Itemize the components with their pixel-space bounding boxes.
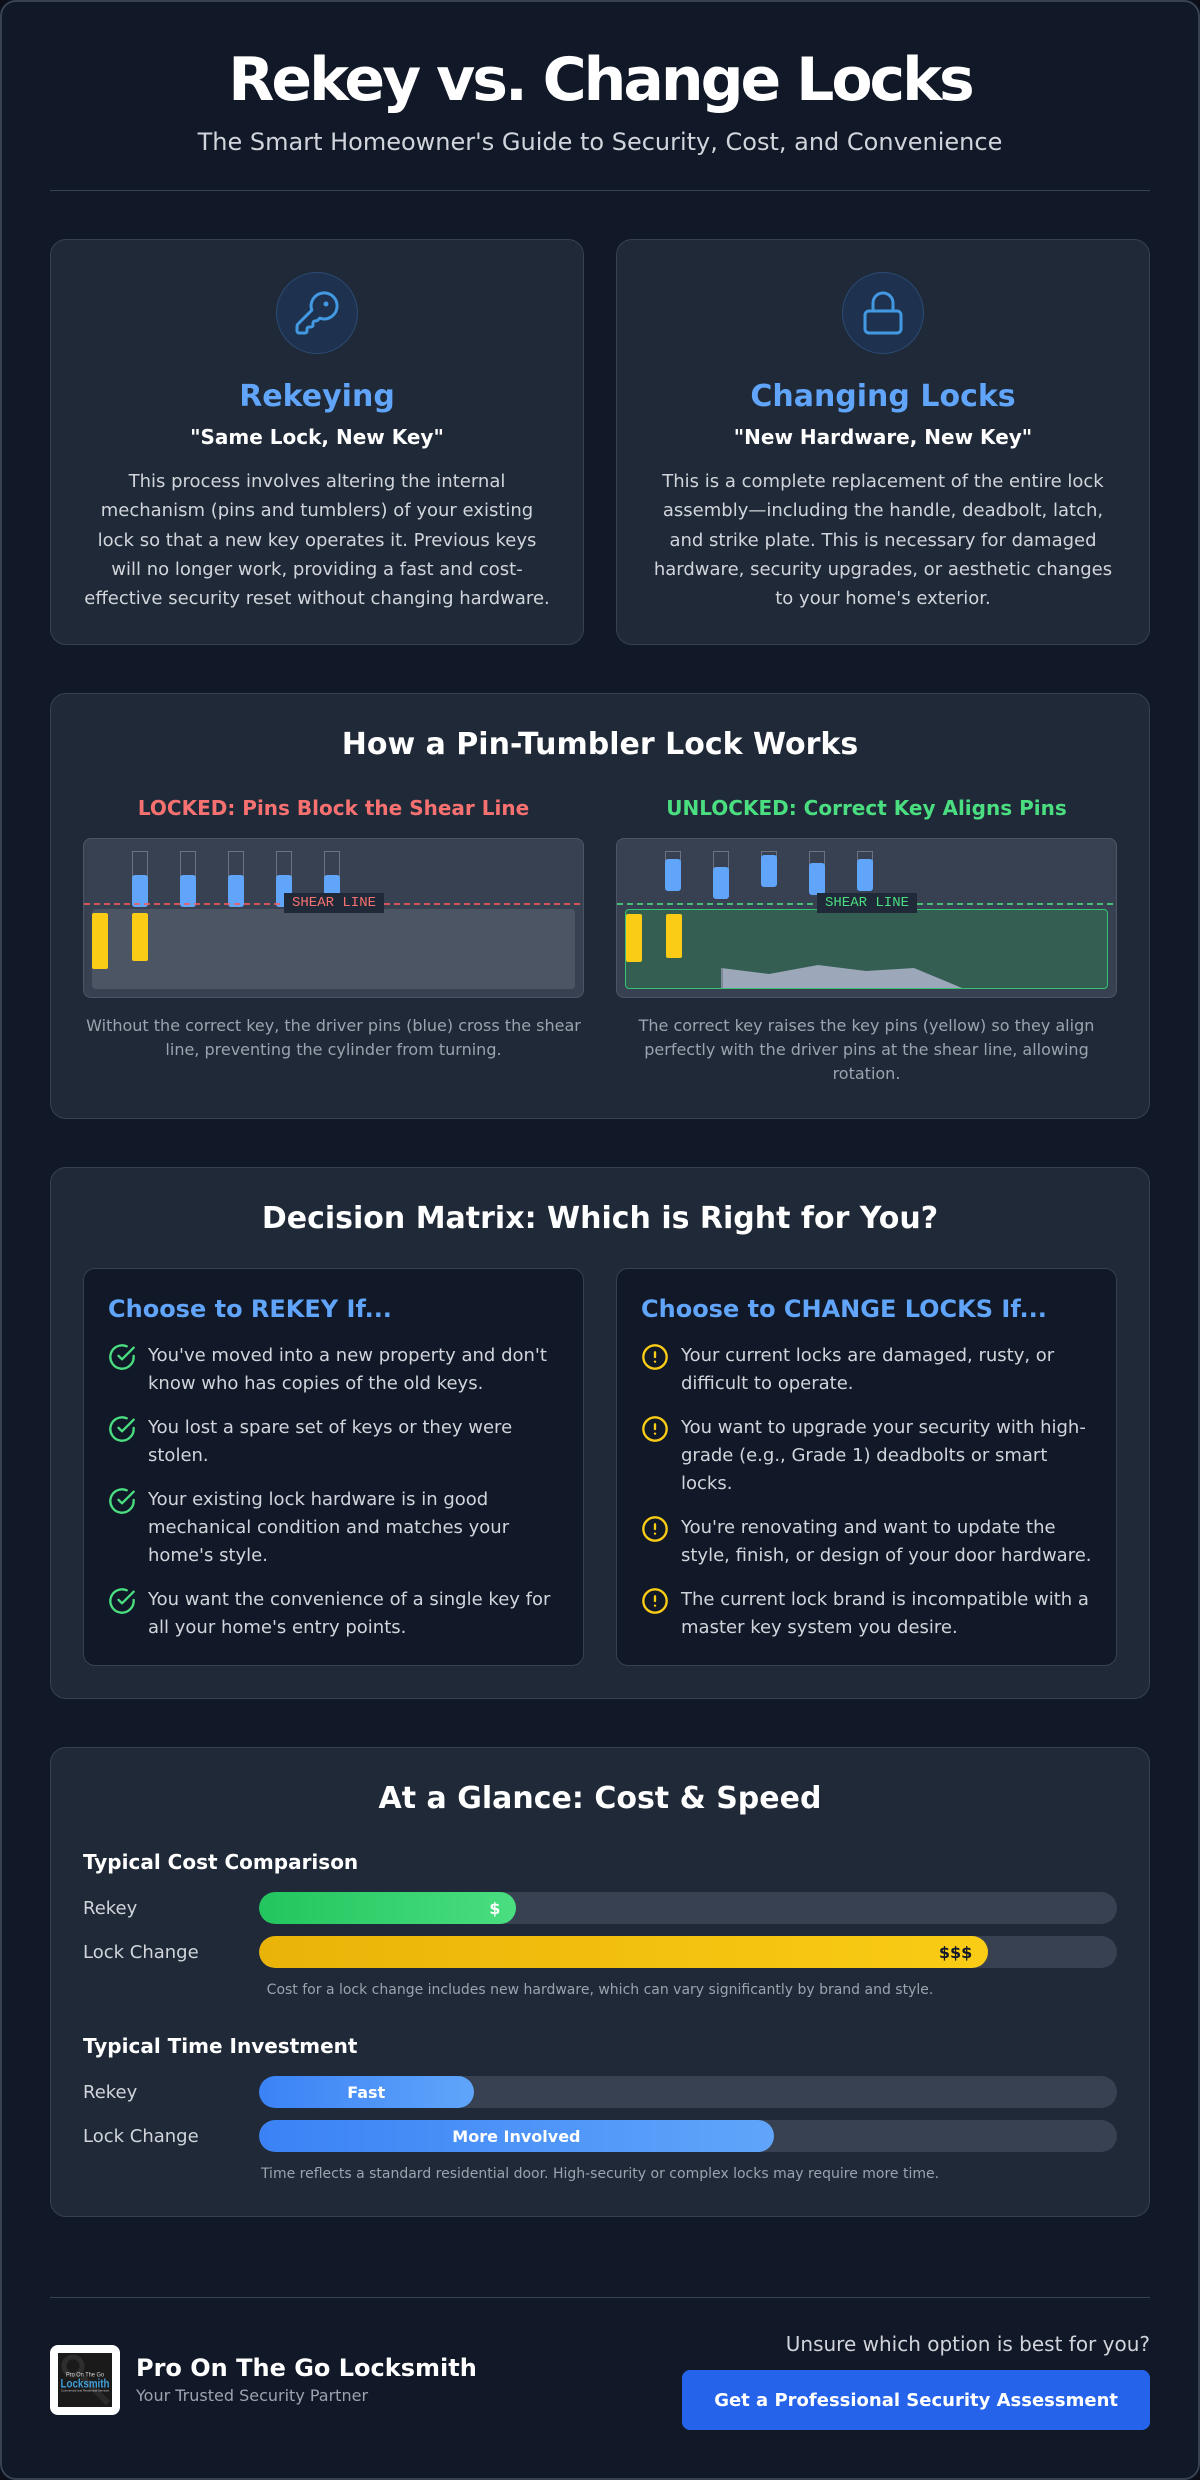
list item: good condition: home's style. bbox=[148, 1545, 268, 1566]
heading: changing locks: Changing Locks bbox=[750, 379, 1016, 414]
logo: Commercial and Residential Services bbox=[61, 2389, 110, 2393]
heading: locked: LOCKED: Pins Block the Shear Line bbox=[138, 796, 529, 820]
brand text bbox=[136, 2354, 477, 2405]
list item: lost keys bbox=[109, 1416, 512, 1466]
list item: good condition bbox=[109, 1488, 510, 1566]
diagram: unlocked lock: SHEAR LINE bbox=[825, 895, 909, 911]
list item: single key bbox=[109, 1588, 550, 1638]
panel: choose to rekey bbox=[83, 1268, 584, 1666]
panel: at a glance bbox=[50, 1747, 1150, 2217]
list item: incompatible bbox=[642, 1588, 1089, 1638]
caption: locked bbox=[86, 1016, 581, 1059]
text: rekeying description: This process involves altering the internal bbox=[129, 471, 505, 492]
panel: locked state bbox=[83, 796, 584, 1059]
caption: locked: line, preventing the cylinder from turning. bbox=[165, 1040, 502, 1059]
footer bbox=[50, 2297, 1150, 2430]
tagline: rekeying: "Same Lock, New Key" bbox=[190, 425, 444, 449]
list item: new property: You've moved into a new property and don't bbox=[148, 1345, 547, 1366]
icon: lock bbox=[842, 272, 924, 354]
text: changing locks description bbox=[654, 471, 1112, 609]
bar: rekey time: Fast bbox=[347, 2083, 385, 2102]
bar: lock change time: Lock Change bbox=[83, 2126, 199, 2147]
text: changing locks description: This is a complete replacement of the entire lock bbox=[662, 471, 1104, 492]
bar: rekey cost bbox=[83, 1892, 1117, 1924]
list item: upgrade: You want to upgrade your security with high- bbox=[681, 1417, 1086, 1438]
text: changing locks description: to your home's exterior. bbox=[775, 588, 991, 609]
title: Rekey vs. Change Locks bbox=[228, 45, 972, 115]
panel: changing locks bbox=[616, 239, 1150, 645]
text: changing locks description: assembly—including the handle, deadbolt, latch, bbox=[663, 500, 1103, 521]
list item: upgrade: locks. bbox=[681, 1473, 732, 1494]
list item: new property bbox=[109, 1344, 547, 1394]
bar: rekey time: Rekey bbox=[83, 2082, 137, 2103]
bar: lock change cost: Lock Change bbox=[83, 1942, 199, 1963]
diagram: locked lock bbox=[83, 838, 584, 998]
text: rekeying description bbox=[84, 471, 550, 609]
heading: cost comparison: Typical Cost Comparison bbox=[83, 1850, 358, 1874]
logo: Pro On The Go bbox=[66, 2372, 104, 2379]
brand block bbox=[50, 2345, 477, 2415]
text: rekeying description: lock so that a new key operates it. Previous keys bbox=[98, 530, 536, 550]
matrix columns bbox=[83, 1268, 1117, 1666]
subtitle: The Smart Homeowner's Guide to Security, Cost, and Convenience bbox=[198, 128, 1002, 156]
panel: choose to change locks bbox=[616, 1268, 1117, 1666]
heading: rekey list: Choose to REKEY If... bbox=[108, 1295, 392, 1323]
list item: good condition: mechanical condition and matches your bbox=[148, 1517, 509, 1538]
cta prompt: Unsure which option is best for you? bbox=[786, 2332, 1150, 2356]
heading: at a glance: At a Glance: Cost & Speed bbox=[379, 1781, 821, 1816]
list item: damaged: difficult to operate. bbox=[681, 1373, 854, 1394]
panel: unlocked state bbox=[616, 796, 1117, 1083]
list item: upgrade: grade (e.g., Grade 1) deadbolts or smart bbox=[681, 1445, 1047, 1466]
caption: unlocked: rotation. bbox=[833, 1064, 900, 1083]
icon: key bbox=[276, 272, 358, 354]
cta button bbox=[682, 2370, 1150, 2430]
bar: rekey time bbox=[83, 2076, 1117, 2108]
logo bbox=[50, 2345, 120, 2415]
list item: lost keys: stolen. bbox=[148, 1445, 209, 1466]
panel: how a pin-tumbler lock works bbox=[50, 693, 1150, 1119]
note: time: Time reflects a standard residential door. High-security or complex locks may require more time. bbox=[261, 2166, 939, 2182]
bar: rekey cost: Rekey bbox=[83, 1898, 137, 1919]
note: cost: Cost for a lock change includes new hardware, which can vary significantly by brand and style. bbox=[267, 1982, 933, 1998]
list item: new property: know who has copies of the old keys. bbox=[148, 1373, 483, 1394]
caption: unlocked: perfectly with the driver pins at the shear line, allowing bbox=[644, 1040, 1089, 1059]
heading: decision matrix: Decision Matrix: Which is Right for You? bbox=[262, 1201, 938, 1236]
text: rekeying description: effective security reset without changing hardware. bbox=[84, 588, 550, 609]
heading: unlocked: UNLOCKED: Correct Key Aligns Pins bbox=[666, 796, 1067, 820]
header bbox=[50, 50, 1150, 191]
text: changing locks description: and strike plate. This is necessary for damaged bbox=[669, 530, 1097, 550]
company tagline: Your Trusted Security Partner bbox=[136, 2386, 368, 2405]
bar: lock change cost: $$$ bbox=[939, 1943, 972, 1962]
list item: incompatible: master key system you desire. bbox=[681, 1617, 958, 1638]
caption: unlocked bbox=[638, 1016, 1094, 1083]
text: changing locks description: hardware, security upgrades, or aesthetic changes bbox=[654, 559, 1112, 580]
list item: renovating: You're renovating and want to update the bbox=[681, 1517, 1056, 1538]
heading: rekeying: Rekeying bbox=[239, 379, 395, 414]
bar: lock change time bbox=[83, 2120, 1117, 2152]
list item: single key: all your home's entry points. bbox=[148, 1617, 406, 1638]
diagram: unlocked lock bbox=[616, 838, 1117, 998]
bar: lock change cost bbox=[83, 1936, 1117, 1968]
list item: damaged: Your current locks are damaged, rusty, or bbox=[681, 1345, 1054, 1366]
text: rekeying description: will no longer work, providing a fast and cost- bbox=[111, 559, 523, 580]
list item: upgrade bbox=[642, 1416, 1086, 1494]
caption: unlocked: The correct key raises the key pins (yellow) so they align bbox=[639, 1016, 1094, 1035]
list item: lost keys: You lost a spare set of keys or they were bbox=[148, 1417, 512, 1438]
call to action bbox=[682, 2332, 1150, 2430]
bar: lock change time: More Involved bbox=[452, 2127, 580, 2146]
list item: good condition: Your existing lock hardware is in good bbox=[148, 1489, 488, 1510]
list item: incompatible: The current lock brand is incompatible with a bbox=[681, 1589, 1089, 1610]
heading: change locks list: Choose to CHANGE LOCKS If... bbox=[641, 1295, 1047, 1323]
heading: pin tumbler: How a Pin-Tumbler Lock Works bbox=[342, 727, 858, 762]
heading: time investment: Typical Time Investment bbox=[83, 2034, 357, 2058]
tagline: changing locks: "New Hardware, New Key" bbox=[734, 425, 1032, 449]
list item: single key: You want the convenience of a single key for bbox=[148, 1589, 550, 1610]
bar: rekey cost: $ bbox=[489, 1899, 500, 1918]
diagram: locked lock: SHEAR LINE bbox=[292, 895, 376, 911]
panel: rekeying bbox=[50, 239, 584, 645]
list item: damaged bbox=[642, 1344, 1054, 1394]
company name: Pro On The Go Locksmith bbox=[136, 2354, 477, 2382]
diagrams bbox=[83, 796, 1117, 1083]
cta button: Get a Professional Security Assessment bbox=[714, 2390, 1118, 2411]
text: rekeying description: mechanism (pins and tumblers) of your existing bbox=[101, 500, 533, 521]
caption: locked: Without the correct key, the driver pins (blue) cross the shear bbox=[86, 1016, 581, 1035]
list item: renovating: style, finish, or design of your door hardware. bbox=[681, 1545, 1092, 1566]
list item: renovating bbox=[642, 1516, 1092, 1566]
comparison cards bbox=[50, 239, 1150, 645]
panel: decision matrix bbox=[50, 1167, 1150, 1699]
